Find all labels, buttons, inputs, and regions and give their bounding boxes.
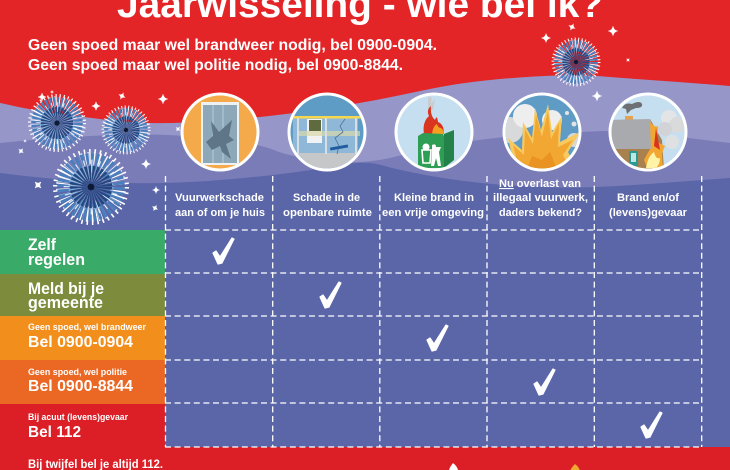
icon: broken door	[180, 92, 260, 172]
column label: Kleine brand	[382, 192, 484, 219]
column label: Schade openbare ruimte: Schade in de	[293, 192, 360, 204]
wave: medium purple band	[0, 131, 730, 470]
column label: Brand en/of gevaar: Brand en/of	[617, 192, 679, 204]
column label: Schade openbare ruimte	[283, 192, 372, 219]
column label: Vuurwerkschade: Vuurwerkschade	[175, 192, 264, 204]
column label: Kleine brand: een vrije omgeving	[382, 207, 484, 219]
check: Overlast vuurwerk, politie	[534, 369, 555, 395]
column label: Brand en/of gevaar	[609, 192, 688, 219]
column label: Vuurwerkschade	[175, 192, 265, 219]
column label: Vuurwerkschade: aan of om je huis	[175, 207, 265, 219]
check: Kleine brand, brandweer	[427, 325, 448, 351]
wave: dark blue band	[0, 163, 730, 447]
row: Zelf regelen: Zelf	[28, 235, 56, 254]
row: Bel 0900-0904: Geen spoed, wel brandweer	[28, 322, 146, 333]
dashed table grid	[165, 176, 702, 447]
check: Vuurwerkschade, zelf regelen	[213, 238, 234, 264]
icon: illegal firework explosion	[497, 92, 583, 172]
bottom red band	[0, 447, 730, 470]
row: Zelf regelen: regelen	[28, 250, 85, 269]
fireworks left cluster	[34, 100, 146, 217]
row: Bel 0900-8844: Geen spoed, wel politie	[28, 367, 127, 378]
icon: orange flame bottom	[570, 464, 580, 470]
stars	[17, 22, 631, 212]
row: Meld bij je gemeente: gemeente	[28, 293, 103, 312]
subtitle text block: Geen spoed maar wel brandweer nodig, bel 0900-0904.	[28, 37, 437, 54]
row: Meld bij je gemeente: Meld bij je	[28, 279, 104, 298]
row: Bel 112: Bel 112	[28, 424, 81, 441]
column label: Brand en/of gevaar: (levens)gevaar	[609, 207, 688, 219]
row: Bel 112	[0, 404, 165, 447]
row: Meld bij je gemeente	[0, 274, 165, 316]
icon: white flame bottom	[449, 463, 458, 470]
column label: Nu overlast: illegaal vuurwerk,	[493, 192, 588, 204]
column label: Schade openbare ruimte: openbare ruimte	[283, 207, 372, 219]
row: Bel 112: Bij acuut (levens)gevaar	[28, 412, 128, 423]
subtitle text block: Geen spoed maar wel politie nodig, bel 0900-8844.	[28, 57, 403, 74]
row: Bel 0900-0904	[0, 316, 165, 360]
firework top right	[556, 42, 596, 82]
check: Schade openbare ruimte, gemeente	[320, 282, 341, 308]
row: Bel 0900-0904: Bel 0900-0904	[28, 334, 133, 351]
column label: Kleine brand: Kleine brand in	[394, 192, 474, 204]
icon: house on fire	[605, 92, 689, 172]
icon: damaged bus shelter	[288, 92, 368, 173]
column label: Nu overlast: daders bekend?	[499, 207, 582, 219]
column label: Nu overlast	[493, 178, 588, 219]
check: Brand en gevaar, 112	[641, 412, 662, 438]
row: Bel 0900-8844: Bel 0900-8844	[28, 378, 133, 395]
column label: Nu overlast: Nu overlast van	[499, 178, 581, 190]
row: Bel 0900-8844	[0, 360, 165, 404]
subtitle text block	[28, 37, 437, 74]
icon: burning bin	[394, 92, 475, 172]
row: Zelf regelen	[0, 230, 165, 274]
